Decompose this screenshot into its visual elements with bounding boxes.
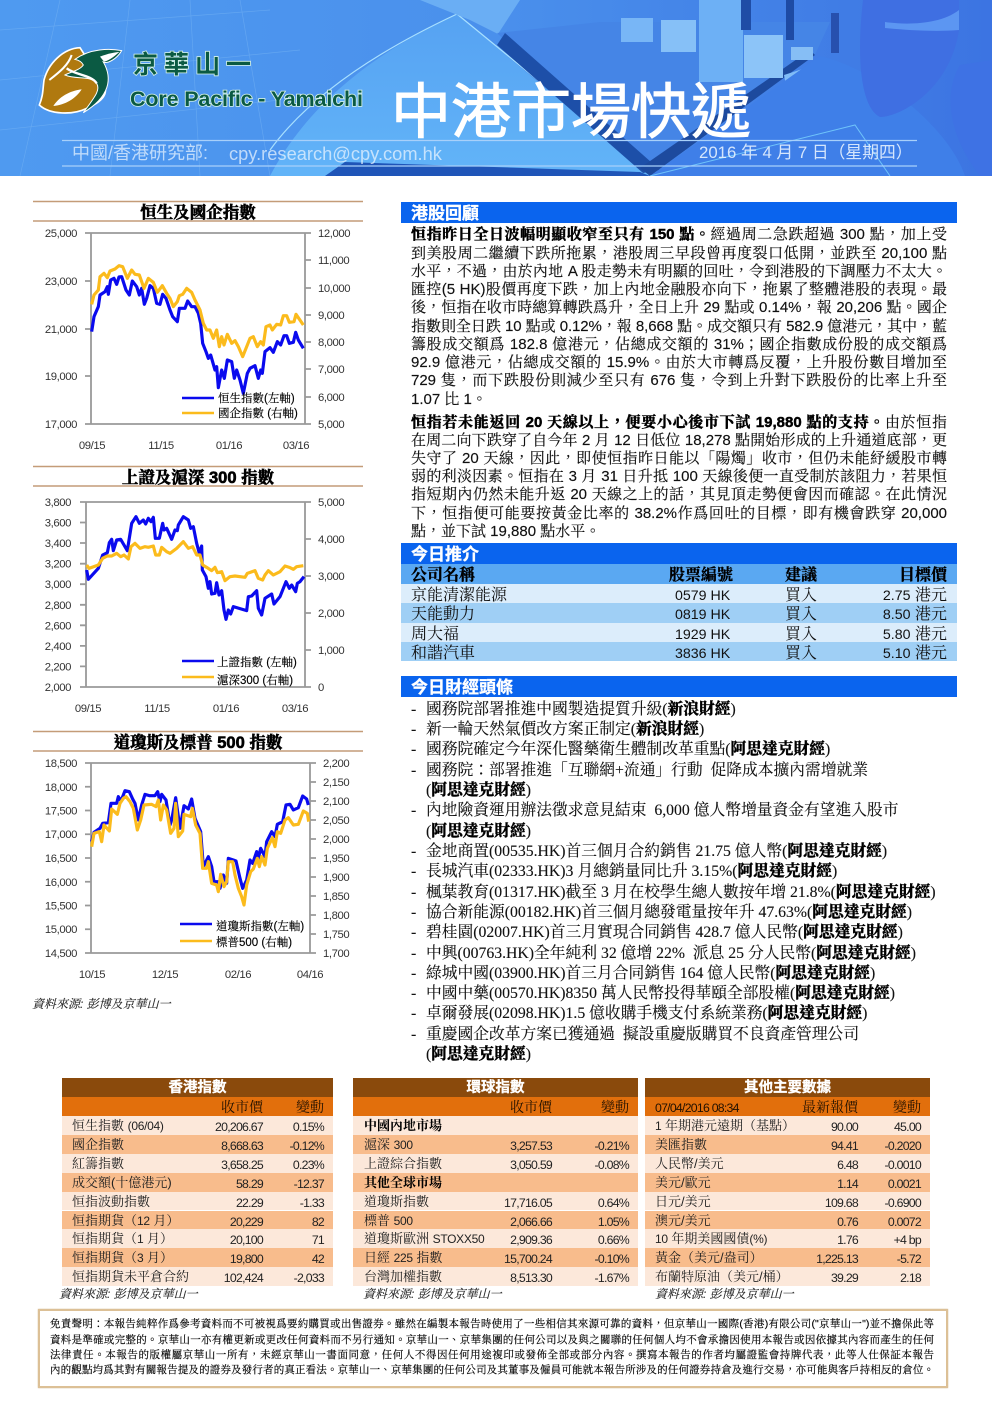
list: headlines: 中國中藥(00570.HK)8350 萬人民幣投得華頤全部股權(阿思達克財經) — [426, 985, 895, 1002]
table rows: -0.2020 — [885, 1139, 921, 1153]
table title: 環球指數 — [466, 1080, 524, 1096]
column headers — [645, 1097, 930, 1116]
chart: Shanghai and CSI 300: 2,000 — [45, 682, 71, 694]
row: stock 2 — [401, 603, 957, 623]
table rows: 標普 500 — [364, 1212, 413, 1228]
chart: Shanghai and CSI 300: 3,400 — [45, 538, 71, 550]
chart: HSI and HSCEI: 25,000 — [45, 228, 77, 240]
table rows: 45.00 — [894, 1120, 921, 1134]
table rows: 3,658.25 — [221, 1158, 263, 1172]
column headers — [62, 1097, 333, 1116]
table rows: -12.37 — [294, 1177, 324, 1191]
list: headlines: 楓葉教育(01317.HK)截至 3 月在校學生總人數按年增 21.8%(阿思達克財經) — [426, 884, 936, 901]
table rows: -5.72 — [897, 1252, 921, 1266]
chart: HSI and HSCEI: 7,000 — [318, 364, 344, 376]
table rows: 上證綜合指數 — [364, 1156, 442, 1171]
table rows: 17,716.05 — [504, 1196, 552, 1210]
table rows: 10 年期美國國債(%) — [655, 1231, 767, 1246]
table rows: 0.15% — [293, 1120, 324, 1134]
list: headlines: (阿思達克財經) — [426, 782, 531, 799]
chart: Shanghai and CSI 300: 5,000 — [318, 497, 344, 509]
text block: paragraph one: 到美股周二繼續下跌所拖累，港股周三早段曾再度裂口低開，並跌至 20,100 點 — [411, 245, 947, 262]
table rows — [353, 1116, 638, 1286]
list: headlines: 綠城中國(03900.HK)首三月合同銷售 164 億人民幣(阿思達克財經) — [426, 965, 875, 982]
chart: HSI and HSCEI: 23,000 — [45, 276, 77, 288]
text block: paragraph one: 恒指昨日全日波幅明顯收窄至只有 150 點。經過周二急跌超過 300 點，加上受 — [411, 226, 947, 243]
row: stock 4: 3836 HK — [675, 646, 730, 662]
chart: Dow Jones and S&P 500: 1,850 — [323, 891, 349, 903]
table rows: 0.76 — [837, 1214, 858, 1228]
table rows: -2,033 — [294, 1271, 324, 1285]
text block: paragraph two: 弱的利淡因素。恒指在 3 月 31 日升抵 100 天線後便一直受制於該阻力，若果恒 — [411, 468, 947, 485]
text block: paragraph two: 失守了 20 天線，因此，即使恒指昨日能以「陽燭」收市，但仍未能紓緩股市轉 — [411, 450, 947, 467]
heading: recommendations — [401, 543, 957, 564]
panel: Hong Kong market review — [401, 202, 957, 540]
table rows: 22.29 — [236, 1196, 263, 1210]
text block: paragraph one: 92.9 億港元，佔總成交額的 15.9%。由於大市轉爲反覆，上升股份數目增加至 — [411, 354, 947, 371]
legend: 恒生指數(左軸) — [218, 391, 295, 405]
list: headlines: 國務院：部署推進「互聯網+流通」行動 促降成本擴內需增就業 — [426, 762, 868, 779]
column headers: 變動 — [893, 1099, 921, 1115]
chart: HSI and HSCEI: 6,000 — [318, 392, 344, 404]
row: stock 3: 買入 — [785, 626, 817, 642]
row: stock 1: 京能清潔能源 — [411, 587, 507, 604]
table rows: 0.0021 — [888, 1177, 921, 1191]
table rows: 澳元/美元 — [655, 1212, 711, 1228]
chart: Dow Jones and S&P 500: 2,050 — [323, 815, 349, 827]
table rows: 102,424 — [224, 1271, 263, 1285]
panel: disclaimer: 免責聲明：本報告純粹作爲參考資料而不可被視爲要約購買或出售證券。雖然在編製本報告時使用了一些相信其來源可靠的資料，但京華山一國際(香港)有限公司("京華山一")並不擔保此等 — [50, 1318, 934, 1330]
list: headlines: 金地商置(00535.HK)首三個月合約銷售 21.75 億人幣(阿思達克財經) — [426, 843, 887, 860]
list: headlines: - — [411, 863, 416, 880]
list: headlines: - — [411, 741, 416, 758]
table rows: -0.21% — [595, 1139, 629, 1153]
report date: 2016 年 4 月 7 日（星期四） — [699, 143, 913, 162]
title: 中港市場快遞 — [391, 79, 751, 146]
chart heading: 恒生及國企指數 — [140, 202, 256, 222]
table rows: 90.00 — [831, 1120, 858, 1134]
source note: 資料來源: 彭博及京華山一 — [655, 1287, 794, 1301]
table title — [353, 1078, 638, 1097]
chart: Shanghai and CSI 300: 2,800 — [45, 600, 71, 612]
chart: Shanghai and CSI 300: 01/16 — [213, 703, 239, 715]
chart: Dow Jones and S&P 500: 15,500 — [45, 900, 77, 912]
chart: Shanghai and CSI 300: 2,600 — [45, 620, 71, 632]
chart source note: 資料來源: 彭博及京華山一 — [32, 997, 172, 1011]
table rows: 1,225.13 — [816, 1252, 858, 1266]
panel: financial headlines — [401, 676, 957, 1063]
chart: HSI and HSCEI: 17,000 — [45, 419, 77, 431]
chart heading: 道瓊斯及標普 500 指數 — [114, 732, 283, 752]
list: headlines: (阿思達克財經) — [426, 1046, 531, 1063]
row: stock 4 — [401, 642, 957, 661]
research department and email — [72, 143, 442, 164]
table rows: 6.48 — [837, 1158, 858, 1172]
table rows: 2.18 — [900, 1271, 921, 1285]
table header: 股票編號 — [669, 567, 733, 584]
row: stock 2: 8.50 港元 — [883, 606, 947, 623]
chart: Shanghai and CSI 300: 2,000 — [318, 608, 344, 620]
list: headlines: - — [411, 965, 416, 982]
legend — [182, 391, 298, 420]
chart: Dow Jones and S&P 500 — [33, 732, 363, 981]
table rows: 15,700.24 — [504, 1252, 552, 1266]
chart: Shanghai and CSI 300: 2,200 — [45, 661, 71, 673]
table rows: 1.05% — [598, 1214, 629, 1228]
table rows — [645, 1116, 930, 1286]
table rows: 20,206.67 — [215, 1120, 263, 1134]
heading: market review: 港股回顧 — [411, 204, 479, 223]
panel: charts column — [32, 200, 363, 1011]
list: headlines: - — [411, 945, 416, 962]
table header: 目標價 — [899, 567, 947, 584]
column headers: 收市價 — [221, 1099, 263, 1115]
list: headlines: - — [411, 924, 416, 941]
research department and email: cpy.research@cpy.com.hk — [229, 143, 442, 164]
text block: paragraph two: 恒指若未能返回 20 天線以上，便要小心後市下試 19,880 點的支持。由於恒指 — [411, 414, 947, 431]
table rows: 恒指期貨（3 月） — [72, 1250, 173, 1265]
text block: paragraph two: 點，並下試 19,880 點水平。 — [411, 523, 600, 540]
chart: HSI and HSCEI: 19,000 — [45, 371, 77, 383]
table rows: 國企指數 — [72, 1137, 124, 1152]
table rows: -1.67% — [595, 1271, 629, 1285]
table rows: 1 年期港元遠期（基點） — [655, 1118, 795, 1133]
table rows: 0.23% — [293, 1158, 324, 1172]
list: headlines: - — [411, 843, 416, 860]
chart: Dow Jones and S&P 500: 2,200 — [323, 758, 349, 770]
text block: paragraph one — [411, 226, 947, 408]
chart: HSI and HSCEI: 9,000 — [318, 310, 344, 322]
table rows: 美匯指數 — [655, 1137, 707, 1152]
table rows: -0.12% — [290, 1139, 324, 1153]
chart: HSI and HSCEI: 10,000 — [318, 283, 350, 295]
table rows: -0.08% — [595, 1158, 629, 1172]
row: stock 3: 1929 HK — [675, 626, 730, 642]
row: stock 1: 2.75 港元 — [883, 587, 947, 604]
list: headlines: 協合新能源(00182.HK)首三個月總發電量按年升 47.63%(阿思達克財經) — [426, 904, 912, 921]
panel: disclaimer: 內的觀點均爲其對有關報告提及的證券及發行者的真正看法。京華山一、京華集團的任何公司及其董事及僱員可能就本報告所涉及的任何證券持倉及進行交易，亦可能與客戶持相反的倉位。 — [50, 1364, 934, 1376]
chart: Shanghai and CSI 300: 3,200 — [45, 559, 71, 571]
row: stock 3 — [401, 622, 957, 642]
table rows: 20,100 — [230, 1233, 263, 1247]
heading: financial headlines — [401, 676, 957, 697]
column headers: 變動 — [296, 1099, 324, 1115]
chart: HSI and HSCEI: 12,000 — [318, 228, 350, 240]
panel: disclaimer: 資料是準確或完整的。京華山一亦有權更新或更改任何資料而不另行通知。京華山一、京華集團的任何公司以及與之關聯的任何個人均不會承擔因使用本報告或因依據其內容而產生的任何 — [50, 1334, 934, 1346]
table rows: -0.0010 — [885, 1158, 921, 1172]
table rows: 恒指波動指數 — [72, 1194, 150, 1209]
table rows — [62, 1116, 333, 1286]
chart: Shanghai and CSI 300: 4,000 — [318, 534, 344, 546]
table title: 其他主要數據 — [744, 1080, 831, 1096]
table rows: 2,066.66 — [510, 1214, 552, 1228]
list: headlines: - — [411, 721, 416, 738]
panel: disclaimer: 法律責任。本報告的版權屬京華山一所有，未經京華山一書面同意，任何人不得因任何用途複印或發佈全部或部分內容。撰寫本報告的作者均屬證監會持牌代表，此等人仕保証本報告 — [50, 1349, 934, 1361]
table rows: 日經 225 指數 — [364, 1250, 442, 1265]
table rows: 布蘭特原油（美元/桶） — [655, 1269, 789, 1284]
panel: stock recommendations — [401, 543, 957, 662]
text block: paragraph one: 水平，不過，由於內地 A 股走勢未有明顯的回吐，令到港股的下調壓力不太大。 — [411, 263, 947, 280]
column headers: 變動 — [601, 1099, 629, 1115]
list: headlines: (阿思達克財經) — [426, 823, 531, 840]
table rows: 黃金（美元/盎司） — [655, 1250, 763, 1265]
table rows: 日元/美元 — [655, 1194, 711, 1209]
text block: paragraph one: 729 隻，而下跌股份則減少至只有 676 隻，令到上升對下跌股份的比率上升至 — [411, 372, 947, 389]
chart: Dow Jones and S&P 500: 2,000 — [323, 834, 349, 846]
list: headlines: - — [411, 762, 416, 779]
table rows: 0.66% — [598, 1233, 629, 1247]
table rows: 94.41 — [831, 1139, 858, 1153]
chart heading: 上證及滬深 300 指數 — [122, 467, 275, 487]
legend — [180, 919, 304, 949]
heading: market review — [401, 202, 957, 223]
text block: paragraph two — [411, 414, 947, 540]
chart: Dow Jones and S&P 500: 17,000 — [45, 829, 77, 841]
chart: Dow Jones and S&P 500: 1,950 — [323, 853, 349, 865]
table rows: 0.64% — [598, 1196, 629, 1210]
panel: disclaimer — [38, 1309, 948, 1388]
chart: Dow Jones and S&P 500: 1,750 — [323, 929, 349, 941]
table rows: 台灣加權指數 — [364, 1269, 442, 1284]
chart: Shanghai and CSI 300: 09/15 — [75, 703, 101, 715]
chart: Shanghai and CSI 300: 3,800 — [45, 497, 71, 509]
source note: 資料來源: 彭博及京華山一 — [363, 1287, 502, 1301]
list: headlines: 重慶國企改革方案已獲通過 擬設重慶版購買不良資產管理公司 — [426, 1026, 859, 1043]
text block: paragraph one: 匯控(5 HK)股價再度下跌，加上內地金融股亦向下，拖累了整體港股的表現。最 — [411, 281, 947, 298]
chart: Dow Jones and S&P 500: 17,500 — [45, 806, 77, 818]
list: headlines: - — [411, 884, 416, 901]
table rows: -0.6900 — [885, 1196, 921, 1210]
list: headlines: - — [411, 1005, 416, 1022]
row: stock 1: 0579 HK — [675, 588, 730, 604]
logo text: English company name: Core Pacific - Yamaichi — [130, 87, 363, 111]
chart: Shanghai and CSI 300 — [33, 466, 363, 715]
table rows: 8,513.30 — [510, 1271, 552, 1285]
chart: Dow Jones and S&P 500: 18,000 — [45, 782, 77, 794]
text block: paragraph two: 下，恒指便可能要按黃金比率的 38.2%作爲回吐的目標，即有機會跌穿 20,000 — [411, 505, 947, 522]
legend: 滬深300 (右軸) — [217, 673, 293, 687]
chart: Shanghai and CSI 300: 3,000 — [45, 579, 71, 591]
logo text: Chinese company name: 京華山一 — [133, 51, 257, 79]
chart: Dow Jones and S&P 500: 18,500 — [45, 758, 77, 770]
chart: Dow Jones and S&P 500: 10/15 — [79, 969, 105, 981]
table rows: 道瓊斯指數 — [364, 1194, 429, 1209]
table rows: 恒指期貨（1 月） — [72, 1231, 173, 1246]
list: headlines: 卓爾發展(02098.HK)1.5 億收購手機支付系統業務(阿思達克財經) — [426, 1005, 867, 1022]
table rows: 58.29 — [236, 1177, 263, 1191]
column headers: 07/04/2016 08:34 — [655, 1101, 739, 1115]
table title — [645, 1078, 930, 1097]
chart: Shanghai and CSI 300: 0 — [318, 682, 324, 694]
chart: Dow Jones and S&P 500: 02/16 — [225, 969, 251, 981]
text block: paragraph one: 指數則全日跌 10 點或 0.12%，報 8,668 點。成交額只有 582.9 億港元，其中，藍 — [411, 318, 947, 335]
legend — [182, 655, 297, 687]
table rows: 3,257.53 — [510, 1139, 552, 1153]
table rows: 1.14 — [837, 1177, 858, 1191]
table rows: 3,050.59 — [510, 1158, 552, 1172]
table rows: 成交額(十億港元) — [72, 1175, 172, 1190]
row: stock 3: 周大福 — [411, 626, 459, 642]
column headers: 收市價 — [510, 1099, 552, 1115]
row: stock 4: 和諧汽車 — [411, 645, 475, 662]
list: headlines: - — [411, 985, 416, 1002]
table rows: 42 — [312, 1252, 324, 1266]
legend: 上證指數 (左軸) — [217, 655, 297, 669]
list: headlines: - — [411, 802, 416, 819]
row: stock 2: 買入 — [785, 606, 817, 623]
chart: HSI and HSCEI: 11/15 — [148, 440, 174, 452]
header banner — [0, 0, 992, 176]
chart: Dow Jones and S&P 500: 15,000 — [45, 924, 77, 936]
table header — [401, 564, 957, 584]
row: stock 1: 買入 — [785, 587, 817, 604]
table rows: 恒生指數 (06/04) — [72, 1118, 164, 1133]
chart: HSI and HSCEI: 01/16 — [216, 440, 242, 452]
text block: paragraph one: 後，恒指在收市時總算轉跌爲升，全日上升 29 點或 0.14%，報 20,206 點。國企 — [411, 299, 947, 316]
row: stock 2: 0819 HK — [675, 607, 730, 623]
chart: Dow Jones and S&P 500: 04/16 — [297, 969, 323, 981]
table rows: 1.76 — [837, 1233, 858, 1247]
table rows: -0.10% — [595, 1252, 629, 1266]
row: stock 1 — [401, 584, 957, 604]
row: stock 3: 5.80 港元 — [883, 626, 947, 642]
chart: HSI and HSCEI: 03/16 — [283, 440, 309, 452]
panel: other key data table — [645, 1078, 930, 1286]
list: headlines: - — [411, 904, 416, 921]
legend: 道瓊斯指數(左軸) — [216, 919, 304, 933]
table rows: 紅籌指數 — [72, 1156, 124, 1171]
chart: Shanghai and CSI 300: 11/15 — [144, 703, 170, 715]
chart: HSI and HSCEI: 11,000 — [318, 255, 349, 267]
chart: Dow Jones and S&P 500: 2,150 — [323, 777, 349, 789]
legend: 國企指數 (右軸) — [218, 406, 298, 420]
chart: Shanghai and CSI 300: 03/16 — [282, 703, 308, 715]
chart: HSI and HSCEI: 5,000 — [318, 419, 344, 431]
list: headlines: 新一輪天然氣價改方案正制定(新浪財經) — [426, 721, 704, 738]
panel: global indices table — [353, 1078, 638, 1286]
list: headlines: 中興(00763.HK)全年純利 32 億增 22% 派息 25 分人民幣(阿思達克財經) — [426, 945, 916, 962]
list: headlines — [411, 700, 936, 1063]
table rows: -1.33 — [300, 1196, 324, 1210]
list: headlines: 碧桂園(02007.HK)首三月實現合同銷售 428.7 億人民幣(阿思達克財經) — [426, 924, 903, 941]
text block: paragraph two: 指短期內仍然未能升返 20 天線之上的話，其見頂走勢便會因而確認。在此情況 — [411, 486, 947, 503]
table rows: 19,800 — [230, 1252, 263, 1266]
column headers — [353, 1097, 638, 1116]
heading: financial headlines: 今日財經頭條 — [411, 678, 513, 697]
list: headlines: 長城汽車(02333.HK)3 月總銷量同比升 3.15%(阿思達克財經) — [426, 863, 837, 880]
chart: Shanghai and CSI 300: 3,000 — [318, 571, 344, 583]
chart: Shanghai and CSI 300: 2,400 — [45, 641, 71, 653]
column headers: 最新報價 — [802, 1099, 858, 1115]
chart: HSI and HSCEI: 8,000 — [318, 337, 344, 349]
panel: Hong Kong indices table — [62, 1078, 333, 1286]
text block: paragraph one: 1.07 比 1。 — [411, 391, 487, 408]
research department and email: 中國/香港研究部: — [72, 143, 208, 163]
chart: Dow Jones and S&P 500: 16,000 — [45, 877, 77, 889]
list: headlines: 國務院部署推進中國製造提質升級(新浪財經) — [426, 701, 736, 718]
icon: company logo — [38, 46, 122, 114]
list: headlines: 內地險資運用辦法徵求意見結束 6,000 億人幣增量資金有望進入股市 — [426, 802, 898, 819]
row: stock 2: 天能動力 — [411, 606, 475, 623]
chart: Dow Jones and S&P 500: 12/15 — [152, 969, 178, 981]
chart: Dow Jones and S&P 500: 2,100 — [323, 796, 349, 808]
table rows: 美元/歐元 — [655, 1175, 711, 1190]
table rows: 道瓊斯歐洲 STOXX50 — [364, 1231, 484, 1246]
table rows: 人民幣/美元 — [655, 1156, 724, 1171]
table header: 建議 — [785, 567, 817, 584]
chart: Dow Jones and S&P 500: 16,500 — [45, 853, 77, 865]
table title — [62, 1078, 333, 1097]
table header: 公司名稱 — [411, 567, 475, 584]
table title: 香港指數 — [168, 1080, 226, 1096]
chart: Dow Jones and S&P 500: 1,700 — [323, 948, 349, 960]
row: stock 4: 買入 — [785, 645, 817, 662]
table rows: 109.68 — [825, 1196, 858, 1210]
table rows: 82 — [312, 1214, 324, 1228]
chart: HSI and HSCEI: 09/15 — [79, 440, 105, 452]
table rows: 71 — [312, 1233, 324, 1247]
chart: Dow Jones and S&P 500: 14,500 — [45, 948, 77, 960]
table rows: 恒指期貨未平倉合約 — [72, 1269, 189, 1284]
text block: paragraph two: 在周二向下跌穿了自今年 2 月 12 日低位 18,278 點開始形成的上升通道底部，更 — [411, 432, 947, 449]
chart: Dow Jones and S&P 500: 1,800 — [323, 910, 349, 922]
table rows: 8,668.63 — [221, 1139, 263, 1153]
row: stock 4: 5.10 港元 — [883, 645, 947, 662]
chart: HSI and HSCEI: 21,000 — [45, 324, 77, 336]
chart: Shanghai and CSI 300: 3,600 — [45, 518, 71, 530]
list: headlines: 國務院確定今年深化醫藥衛生體制改革重點(阿思達克財經) — [426, 741, 830, 758]
text block: paragraph one: 籌股成交額爲 182.8 億港元，佔總成交額的 31%；國企指數成份股的成交額爲 — [411, 336, 947, 353]
legend: 標普500 (右軸) — [216, 935, 292, 949]
chart: HSI and HSCEI — [33, 202, 363, 452]
heading: recommendations: 今日推介 — [411, 545, 479, 564]
chart: Dow Jones and S&P 500: 1,900 — [323, 872, 349, 884]
table rows: 其他全球市場 — [364, 1175, 442, 1190]
list: headlines: - — [411, 1026, 416, 1043]
list: headlines: - — [411, 701, 416, 718]
chart: Shanghai and CSI 300: 1,000 — [318, 645, 344, 657]
table rows: 0.0072 — [888, 1214, 921, 1228]
table rows: 恒指期貨（12 月） — [72, 1212, 179, 1228]
table rows: +4 bp — [894, 1233, 921, 1247]
source note: 資料來源: 彭博及京華山一 — [59, 1287, 198, 1301]
table rows: 2,909.36 — [510, 1233, 552, 1247]
table rows: 20,229 — [230, 1214, 263, 1228]
table rows: 滬深 300 — [364, 1137, 413, 1152]
table rows: 中國內地市場 — [364, 1118, 442, 1133]
table rows: 39.29 — [831, 1271, 858, 1285]
